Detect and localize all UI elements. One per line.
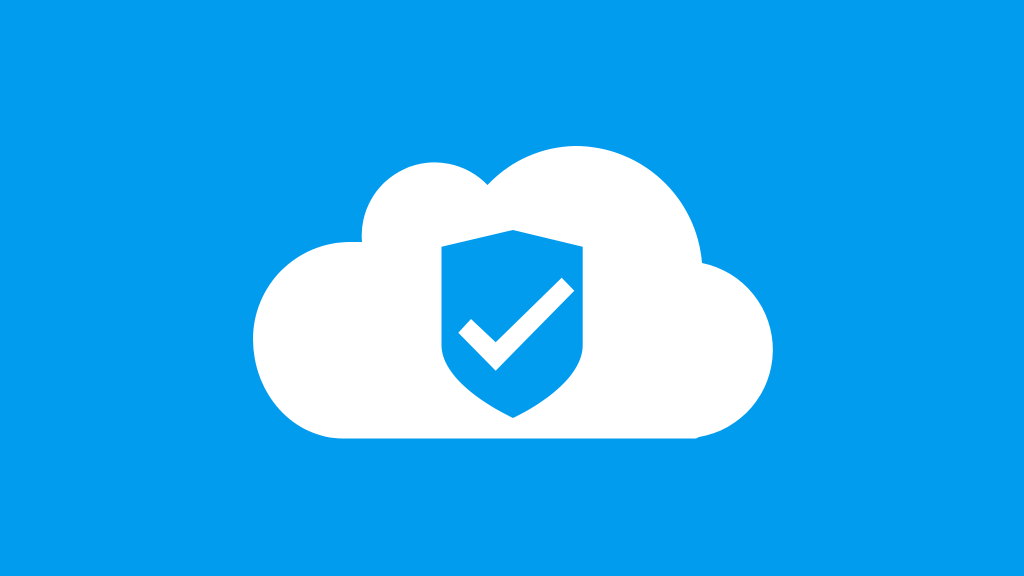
- check mark: [458, 278, 574, 371]
- icon: shield with check mark: [442, 230, 583, 418]
- icon: cloud: [253, 146, 773, 438]
- shield: [442, 230, 583, 418]
